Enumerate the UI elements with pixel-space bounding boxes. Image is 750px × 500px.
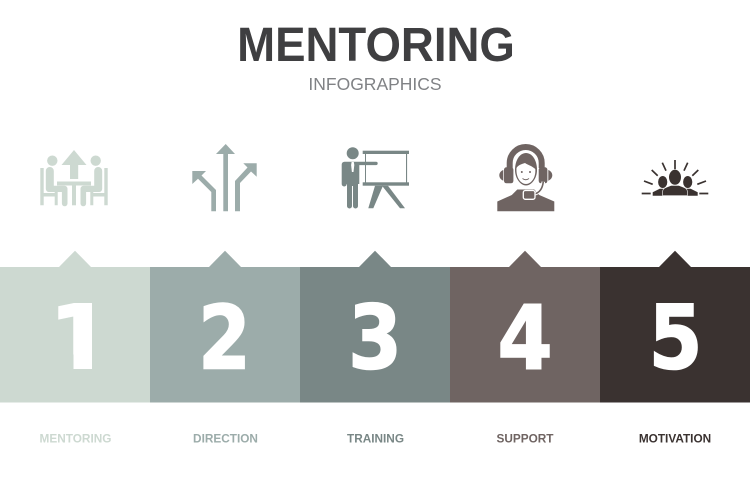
label: training: TRAINING — [347, 432, 404, 446]
panel: step 5 motivation: 5 — [649, 287, 702, 390]
panel: step 5 motivation — [600, 251, 750, 402]
panel: step 2 direction — [150, 251, 300, 402]
icon: three direction arrows — [192, 144, 257, 211]
icon: group with radiating lines — [642, 160, 708, 196]
label: motivation: MOTIVATION — [639, 432, 711, 446]
panel: step 4 support: 4 — [497, 287, 553, 390]
label: mentoring: MENTORING — [40, 432, 111, 446]
icon: presenter at board — [342, 147, 409, 208]
panel: step 4 support — [450, 251, 600, 402]
icon: support agent with headset — [497, 147, 554, 211]
panel: step 3 training: 3 — [348, 287, 402, 390]
icon: meeting at table with arrow — [40, 150, 108, 206]
panel: step 3 training — [300, 251, 450, 402]
panel: step 2 direction: 2 — [198, 288, 251, 390]
label: direction: DIRECTION — [193, 432, 258, 446]
panel: step 1 mentoring — [0, 251, 150, 402]
subtitle: INFOGRAPHICS — [308, 74, 442, 94]
panel: step 1 mentoring: 1 — [49, 286, 111, 390]
label: support: SUPPORT — [496, 432, 554, 446]
title: MENTORING — [237, 17, 515, 71]
